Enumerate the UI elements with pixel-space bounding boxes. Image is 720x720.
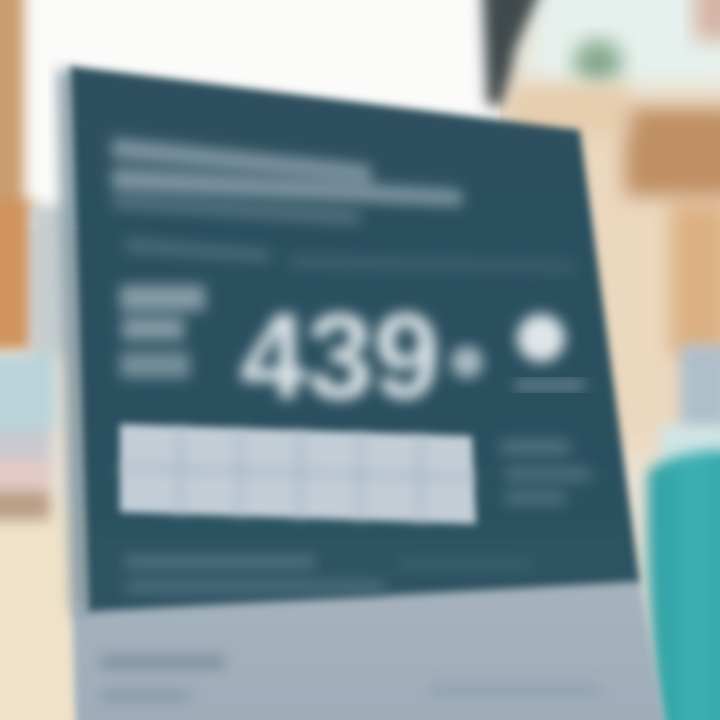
laptop lower body bbox=[72, 578, 668, 720]
light data bar bbox=[120, 424, 476, 524]
large figure: 439 bbox=[240, 288, 440, 424]
laptop lower text bbox=[100, 655, 600, 702]
left background objects bbox=[0, 205, 70, 520]
dark stem and plant, top right bbox=[482, 0, 720, 105]
heading text bbox=[112, 138, 575, 272]
teal cup bbox=[648, 345, 720, 720]
wooden post, left bbox=[0, 0, 34, 350]
dot and small symbol bbox=[451, 314, 585, 390]
dark card panel bbox=[58, 66, 640, 612]
wooden shelf, right bbox=[510, 85, 720, 355]
side text beside bar bbox=[500, 440, 590, 504]
small left figures bbox=[120, 285, 205, 378]
left edge glow bbox=[58, 70, 90, 612]
footer text on card bbox=[125, 556, 530, 592]
